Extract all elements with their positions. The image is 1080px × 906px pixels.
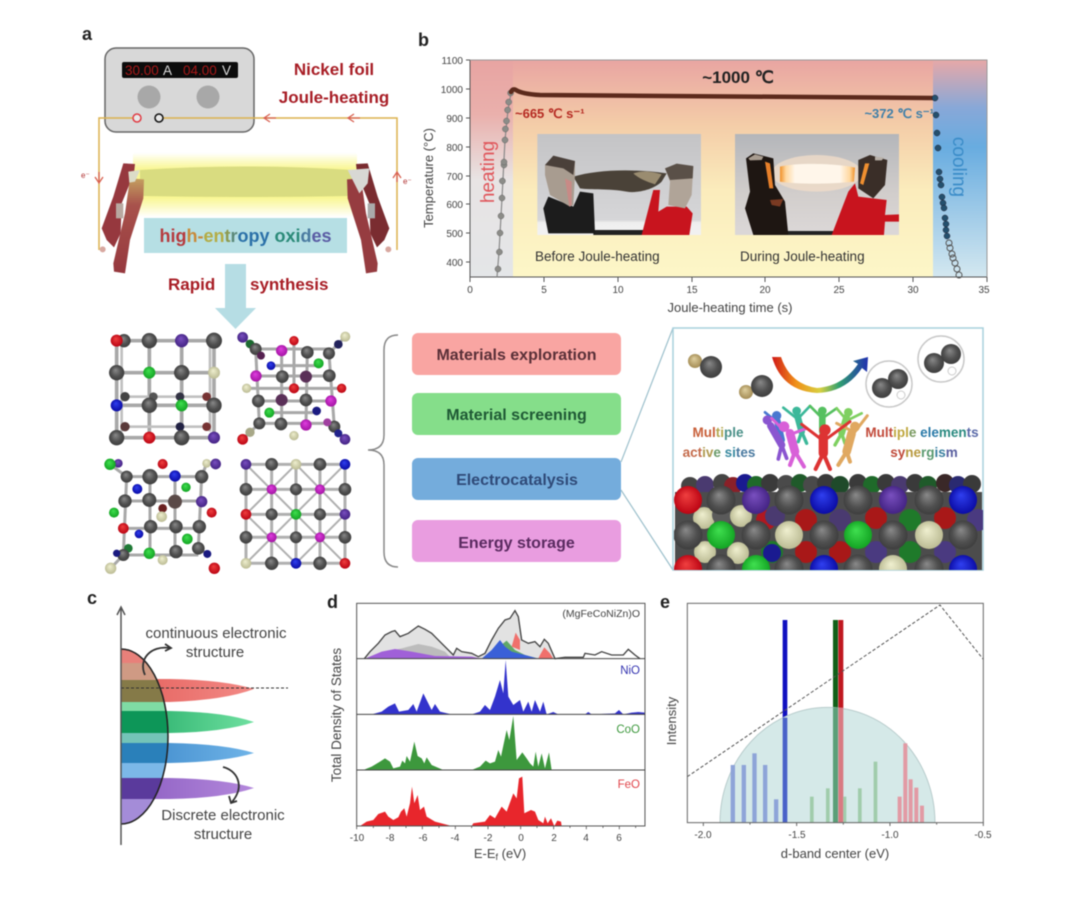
x tick labels bbox=[350, 833, 622, 844]
crystal 1 bbox=[109, 333, 222, 445]
dashed volcano line bbox=[687, 605, 983, 777]
text: continuous electronic structure bbox=[146, 625, 287, 661]
y tick labels: 400 bbox=[446, 258, 463, 269]
DOS curves bbox=[357, 603, 645, 829]
yellow glow around foil bbox=[133, 153, 357, 217]
rainbow reaction arrow bbox=[772, 357, 868, 393]
series label: FeO: FeO bbox=[618, 779, 640, 791]
pink bars bbox=[898, 743, 924, 823]
button: energy storage: Energy storage bbox=[458, 535, 575, 552]
curved arrow: discrete bbox=[223, 767, 239, 803]
x tick labels: -1.5 bbox=[788, 830, 806, 841]
lobe: green bbox=[121, 711, 254, 733]
text: multiple elements synergism bbox=[865, 425, 979, 460]
caption: during: During Joule-heating bbox=[740, 249, 865, 264]
heading: Nickel foil Joule-heating: Joule-heating bbox=[279, 88, 389, 107]
y tick labels: 900 bbox=[446, 114, 463, 125]
x tick labels: -4 bbox=[451, 833, 460, 844]
photo: during Joule-heating bbox=[735, 134, 899, 235]
plot background: heating zone bbox=[470, 60, 513, 277]
plot background: plateau zone bbox=[513, 60, 933, 277]
circuit wire bbox=[99, 118, 397, 250]
CoO DOS bbox=[363, 716, 552, 770]
y tick labels: 800 bbox=[446, 143, 463, 154]
lobe: purple bbox=[121, 778, 254, 799]
x tick labels: -10 bbox=[350, 833, 365, 844]
application buttons bbox=[412, 333, 621, 562]
crystal 2 bbox=[237, 332, 350, 445]
left clip bbox=[100, 163, 144, 273]
button: material screening: Material screening bbox=[446, 407, 587, 424]
crystal 4 bbox=[240, 458, 351, 570]
x axis title: (eV) bbox=[498, 846, 526, 861]
band density half-ellipse bbox=[121, 649, 171, 824]
text: multiple active sites: Multiple bbox=[692, 425, 744, 440]
high-entropy oxides box bbox=[144, 218, 347, 253]
x tick labels: 4 bbox=[583, 833, 589, 844]
electron labels bbox=[81, 171, 412, 186]
panel a: Joule heating setup bbox=[81, 48, 412, 329]
series label: CoO: CoO bbox=[616, 724, 640, 736]
x tick labels: 2 bbox=[551, 833, 557, 844]
NiO DOS bbox=[372, 660, 645, 714]
panel label d: d bbox=[327, 592, 338, 612]
x tick labels: -8 bbox=[386, 833, 395, 844]
text: Rapid synthesis bbox=[168, 275, 328, 294]
total DOS bbox=[364, 611, 640, 659]
heading: Nickel foil Joule-heating bbox=[279, 60, 389, 107]
temperature curve bbox=[495, 89, 962, 278]
y axis title: Total Density of States bbox=[329, 648, 344, 782]
y axis title: Intensity bbox=[664, 696, 679, 745]
x tick labels: 0 bbox=[518, 833, 524, 844]
x axis title: f bbox=[495, 852, 498, 862]
high-entropy oxides box: high-entropy oxides bbox=[159, 226, 332, 246]
panel label e: e bbox=[660, 592, 670, 612]
x tick labels: 0 bbox=[467, 285, 473, 296]
series label: NiO: NiO bbox=[620, 665, 640, 677]
x tick labels bbox=[467, 285, 990, 296]
current arrows bbox=[95, 114, 401, 183]
text: continuous electronic structure: continuous electronic bbox=[146, 625, 287, 642]
series label: total: (MgFeCoNiZn)O bbox=[562, 608, 640, 620]
panel: electrocatalysis detail bbox=[673, 328, 989, 584]
x tick labels: 30 bbox=[907, 285, 919, 296]
text: continuous electronic structure: structure bbox=[186, 644, 244, 661]
x tick labels: -1.0 bbox=[881, 830, 899, 841]
electron labels: e⁻ bbox=[81, 171, 90, 180]
arrow: rapid synthesis bbox=[215, 264, 256, 329]
lobe: red bbox=[121, 679, 254, 702]
button: electrocatalysis bbox=[412, 458, 621, 500]
axis title: temperature: Temperature (°C) bbox=[421, 128, 436, 228]
y tick labels bbox=[441, 56, 463, 269]
x tick labels: 5 bbox=[541, 285, 547, 296]
x tick labels: -0.5 bbox=[974, 830, 992, 841]
FeO DOS bbox=[360, 777, 562, 826]
electron labels: e⁻ bbox=[403, 177, 412, 186]
label: cooling: cooling bbox=[948, 137, 969, 197]
x tick labels: 6 bbox=[616, 833, 622, 844]
annotation: ~1000 degC: ~1000 ℃ bbox=[702, 68, 774, 87]
x tick labels: -2.0 bbox=[694, 830, 712, 841]
text: discrete electronic structure: structure bbox=[194, 826, 252, 843]
text: multiple elements synergism: Multiple elements bbox=[865, 425, 979, 440]
fermi level dashed line bbox=[121, 687, 288, 689]
panel label c: c bbox=[87, 588, 97, 608]
text: discrete electronic structure: Discrete electronic bbox=[161, 807, 285, 824]
curved arrow: continuous bbox=[143, 644, 171, 675]
power supply: A bbox=[163, 63, 172, 78]
caption: before: Before Joule-heating bbox=[535, 249, 660, 264]
x axis title: d-band center (eV) bbox=[781, 846, 889, 861]
button: energy storage bbox=[412, 520, 621, 562]
tall bars seen through the dome bbox=[783, 708, 843, 823]
axis title: time: Joule-heating time (s) bbox=[668, 300, 792, 315]
y tick labels: 1000 bbox=[441, 85, 463, 96]
right clip bbox=[347, 163, 391, 273]
x axis title: E-E bbox=[474, 846, 495, 861]
crystal 3 bbox=[104, 459, 221, 574]
power supply: 04.00 bbox=[183, 63, 217, 78]
x tick labels: 15 bbox=[686, 285, 698, 296]
callout lines to zoomed panel bbox=[621, 328, 673, 570]
frame bbox=[687, 603, 983, 826]
text: multiple active sites: active sites bbox=[683, 445, 755, 460]
people group bbox=[763, 406, 867, 469]
panel: crystal structures bbox=[104, 332, 351, 574]
button: electrocatalysis: Electrocatalysis bbox=[456, 472, 578, 489]
text: multiple elements synergism: synergism bbox=[890, 445, 958, 460]
x tick labels: 20 bbox=[759, 285, 771, 296]
button: material screening bbox=[412, 393, 621, 435]
panel e: d-band center chart bbox=[664, 603, 992, 861]
brace bbox=[368, 335, 398, 567]
nickel foil bbox=[140, 166, 352, 197]
x tick labels: 10 bbox=[612, 285, 624, 296]
panel label a: a bbox=[82, 24, 93, 44]
solid tall bars bbox=[783, 620, 843, 823]
energy axis arrow bbox=[117, 607, 125, 845]
axes bbox=[466, 60, 987, 282]
panel d: density of states chart bbox=[329, 603, 645, 862]
y tick labels: 500 bbox=[446, 229, 463, 240]
y tick labels: 600 bbox=[446, 200, 463, 211]
x tick labels: 25 bbox=[833, 285, 845, 296]
catalyst surface atoms bbox=[673, 473, 984, 571]
text: Rapid synthesis: Rapid bbox=[168, 275, 215, 294]
text: multiple active sites bbox=[683, 425, 755, 460]
x tick labels: 35 bbox=[978, 285, 990, 296]
plot background: cooling zone bbox=[933, 60, 987, 277]
power supply bbox=[105, 48, 254, 132]
x tick labels: -6 bbox=[419, 833, 428, 844]
label: heating: heating bbox=[478, 141, 499, 203]
product bubbles bbox=[866, 336, 964, 407]
frame and baselines bbox=[357, 603, 645, 826]
button: materials exploration: Materials exploration bbox=[436, 347, 597, 364]
lobe: blue bbox=[121, 743, 254, 763]
text: Rapid synthesis: synthesis bbox=[250, 275, 328, 294]
dome distribution bbox=[720, 707, 935, 823]
panel label b: b bbox=[418, 30, 429, 50]
x tick labels: -2 bbox=[484, 833, 493, 844]
annotation: cooling rate: ~372 ℃ s⁻¹ bbox=[864, 106, 934, 121]
panel c: electronic structure diagram bbox=[117, 607, 288, 845]
annotation: heating rate: ~665 ℃ s⁻¹ bbox=[515, 106, 585, 121]
y tick labels: 700 bbox=[446, 172, 463, 183]
green bars bbox=[810, 762, 877, 823]
power terminals bbox=[133, 114, 163, 122]
power supply: 30.00 bbox=[125, 63, 159, 78]
text: discrete electronic structure bbox=[161, 807, 285, 843]
x tick labels bbox=[694, 830, 992, 841]
power supply: V bbox=[222, 63, 231, 78]
heading: Nickel foil Joule-heating: Nickel foil bbox=[294, 60, 374, 79]
y tick labels: 1100 bbox=[441, 56, 463, 67]
blue bars bbox=[731, 753, 778, 823]
photo: before Joule-heating bbox=[537, 134, 701, 235]
panel b: temperature chart bbox=[421, 56, 990, 315]
button: materials exploration bbox=[412, 333, 621, 375]
reactant molecules bbox=[688, 354, 773, 399]
